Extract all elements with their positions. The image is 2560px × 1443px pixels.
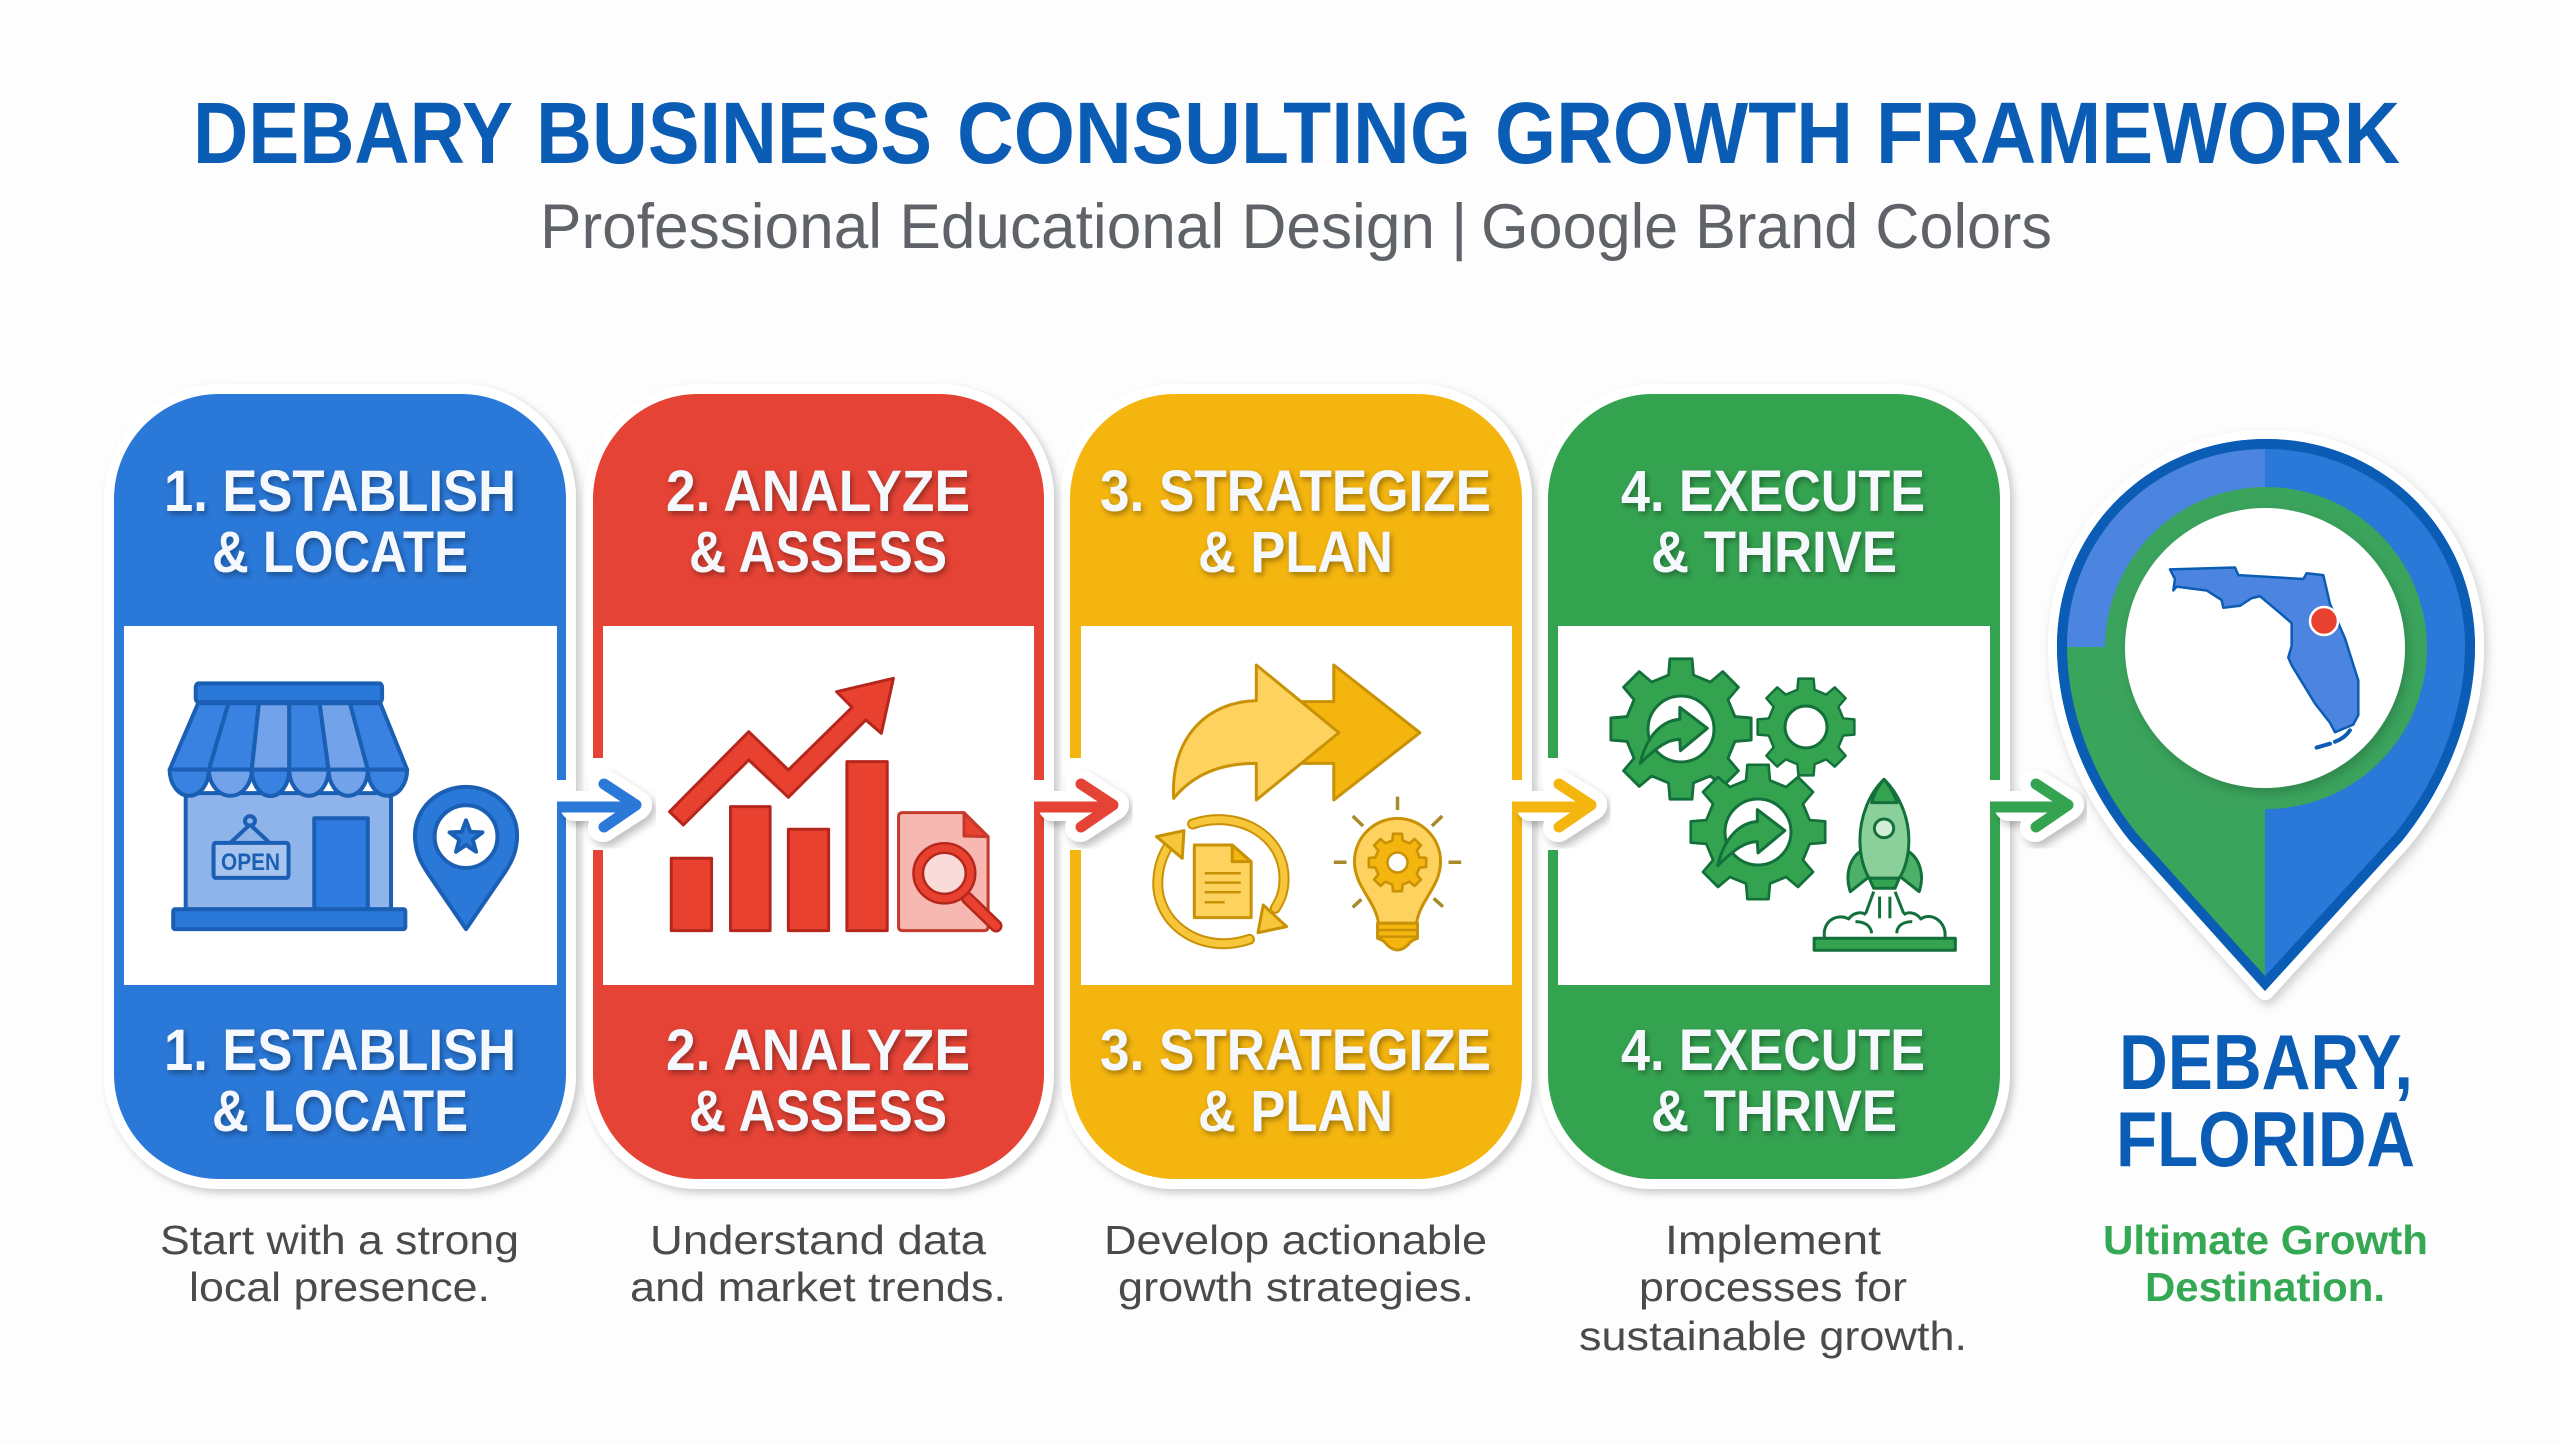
description: step 4: processes for bbox=[1639, 1264, 1907, 1310]
description: step 1: Start with a strong bbox=[160, 1217, 519, 1263]
heading: step 2 top: & ASSESS bbox=[689, 520, 947, 585]
description: destination: Destination. bbox=[2145, 1264, 2385, 1310]
heading: step 4 top: 4. EXECUTE bbox=[1621, 459, 1925, 524]
heading: DeBary, Florida: FLORIDA bbox=[2116, 1095, 2415, 1183]
panel: step 2 analyze and assess bbox=[593, 394, 1044, 1179]
icon: document in cycle arrows bbox=[1156, 820, 1287, 944]
heading: step 1 bottom: & LOCATE bbox=[212, 1079, 468, 1144]
icon: rocket launch bbox=[1814, 779, 1955, 950]
icon: bar chart with rising arrow bbox=[670, 678, 893, 931]
description: step 4: sustainable growth. bbox=[1579, 1313, 1967, 1359]
heading: step 3 bottom bbox=[1100, 1018, 1491, 1144]
panel: step 1 establish and locate bbox=[114, 394, 566, 1179]
description: step 2 bbox=[630, 1217, 1006, 1310]
icon: Florida map bbox=[2170, 567, 2358, 748]
title: FRAMEWORK bbox=[1876, 85, 2400, 182]
heading: step 4 bottom bbox=[1621, 1018, 1925, 1144]
heading: step 4 bottom: & THRIVE bbox=[1651, 1079, 1897, 1144]
panel: destination map pin bbox=[2040, 430, 2490, 1000]
heading: step 1 top: & LOCATE bbox=[212, 520, 468, 585]
heading: step 2 bottom: & ASSESS bbox=[689, 1079, 947, 1144]
heading: step 1 top: 1. ESTABLISH bbox=[164, 459, 516, 524]
title: CONSULTING bbox=[957, 85, 1471, 182]
heading: DeBary, Florida bbox=[2116, 1018, 2415, 1183]
heading: DeBary, Florida: DEBARY, bbox=[2119, 1018, 2413, 1106]
description: step 4 bbox=[1579, 1217, 1967, 1359]
heading: step 2 bottom: 2. ANALYZE bbox=[666, 1018, 970, 1083]
heading: step 2 bottom bbox=[666, 1018, 970, 1144]
arrow: step 4 to destination bbox=[1990, 780, 2069, 827]
description: step 4: Implement bbox=[1665, 1217, 1882, 1263]
subtitle: Google Brand Colors bbox=[1481, 192, 2052, 262]
arrow: step 3 to step 4 bbox=[1512, 758, 1592, 850]
icon: storefront: OPEN bbox=[221, 849, 280, 876]
description: step 2: Understand data bbox=[650, 1217, 986, 1263]
description: step 1: local presence. bbox=[189, 1264, 490, 1310]
icon: DeBary location dot bbox=[2310, 607, 2338, 635]
icon: report with magnifier bbox=[899, 813, 996, 931]
description: step 3: growth strategies. bbox=[1118, 1264, 1474, 1310]
title: BUSINESS bbox=[536, 85, 932, 182]
icon: gear small bbox=[1758, 679, 1854, 775]
heading: step 1 bottom: 1. ESTABLISH bbox=[164, 1018, 516, 1083]
description: step 1 bbox=[160, 1217, 519, 1310]
title: DEBARY bbox=[193, 85, 513, 182]
icon: location pin with star bbox=[415, 787, 517, 929]
arrow: step 2 to step 3 bbox=[1034, 758, 1114, 850]
icon: gear with arrow large bbox=[1611, 659, 1751, 799]
heading: step 1 top bbox=[164, 459, 516, 585]
title: GROWTH bbox=[1495, 85, 1853, 182]
heading: step 3 top bbox=[1100, 459, 1491, 585]
description: step 2: and market trends. bbox=[630, 1264, 1006, 1310]
description: step 3 bbox=[1104, 1217, 1487, 1310]
title bbox=[193, 85, 2400, 182]
heading: step 3 top: 3. STRATEGIZE bbox=[1100, 459, 1491, 524]
subtitle bbox=[540, 192, 2052, 262]
heading: step 2 top bbox=[666, 459, 970, 585]
description: step 3: Develop actionable bbox=[1104, 1217, 1487, 1263]
icon: gear with arrow lower bbox=[1691, 765, 1825, 899]
heading: step 3 top: & PLAN bbox=[1198, 520, 1393, 585]
icon: lightbulb with gear bbox=[1334, 797, 1461, 950]
heading: step 4 top bbox=[1621, 459, 1925, 585]
description: destination: Ultimate Growth bbox=[2103, 1217, 2428, 1263]
icon: storefront bbox=[170, 683, 407, 929]
description: destination bbox=[2103, 1217, 2428, 1310]
heading: step 2 top: 2. ANALYZE bbox=[666, 459, 970, 524]
heading: step 4 top: & THRIVE bbox=[1651, 520, 1897, 585]
arrow: step 1 to step 2 bbox=[557, 758, 637, 850]
heading: step 1 bottom bbox=[164, 1018, 516, 1144]
heading: step 4 bottom: 4. EXECUTE bbox=[1621, 1018, 1925, 1083]
panel: step 4 execute and thrive bbox=[1548, 394, 2000, 1179]
subtitle: Professional Educational Design bbox=[540, 192, 1435, 262]
panel: step 3 strategize and plan bbox=[1070, 394, 1522, 1179]
heading: step 3 bottom: & PLAN bbox=[1198, 1079, 1393, 1144]
heading: step 3 bottom: 3. STRATEGIZE bbox=[1100, 1018, 1491, 1083]
icon: double strategy arrows bbox=[1173, 665, 1420, 800]
subtitle: | bbox=[1451, 192, 1467, 262]
